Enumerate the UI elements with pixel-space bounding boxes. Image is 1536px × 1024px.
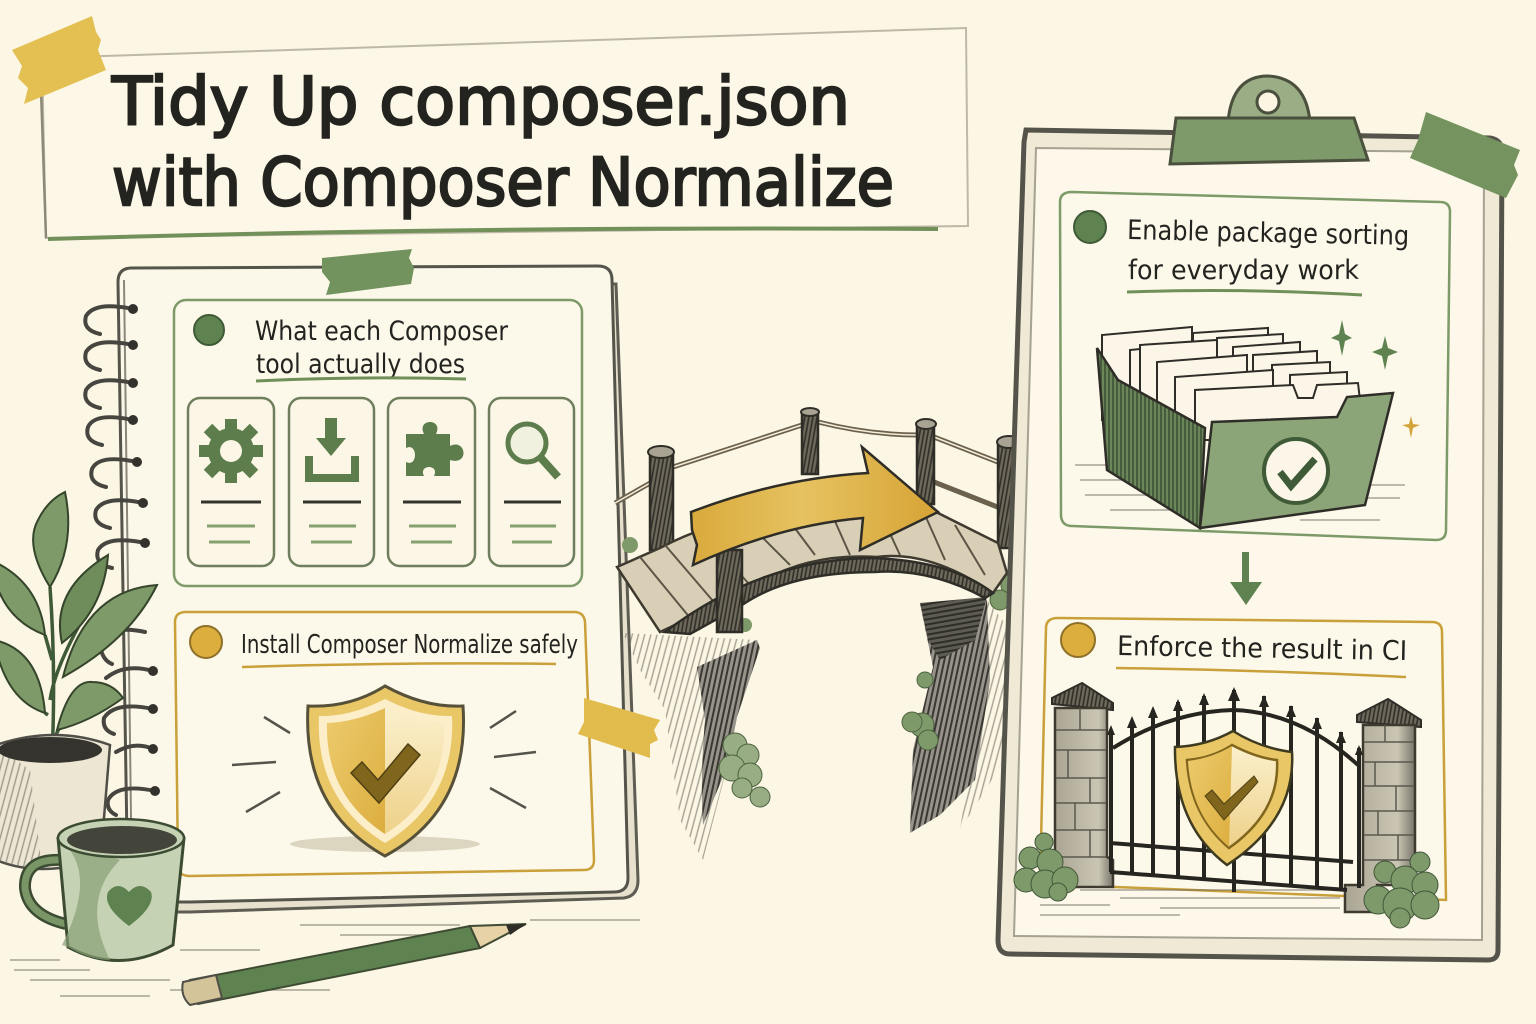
icon: heart bbox=[107, 886, 152, 926]
panel: notebook bbox=[85, 249, 660, 912]
arrow: down bbox=[1230, 552, 1262, 605]
heading: what each tool does: tool actually does bbox=[256, 349, 465, 380]
panel: enforce in CI bbox=[1014, 618, 1446, 928]
clip bbox=[1170, 76, 1368, 164]
panel: install safely bbox=[175, 612, 594, 876]
arrow bbox=[691, 447, 938, 565]
panel: what each tool does bbox=[174, 300, 582, 586]
heading: package sorting bbox=[1127, 215, 1409, 286]
moss bbox=[719, 733, 770, 807]
tape: clipboard corner bbox=[1410, 112, 1520, 198]
title panel bbox=[12, 16, 968, 239]
panel: package sorting bbox=[1060, 192, 1450, 540]
washi tape: title bbox=[12, 16, 106, 104]
arch band bbox=[665, 558, 993, 634]
pot bbox=[0, 735, 110, 869]
heading: what each tool does bbox=[255, 316, 509, 380]
illustration: coffee mug bbox=[25, 819, 184, 961]
tape: notebook top bbox=[322, 249, 414, 295]
heading: package sorting: for everyday work bbox=[1128, 255, 1359, 286]
gate bars bbox=[1110, 690, 1359, 892]
illustration: plant bbox=[0, 492, 157, 869]
bullet: gold bbox=[190, 626, 222, 658]
card: gear bbox=[188, 398, 274, 566]
front post bbox=[717, 550, 742, 632]
left cliff bbox=[623, 633, 760, 860]
card: download bbox=[289, 398, 374, 566]
bullet: gold bbox=[1061, 623, 1095, 657]
spiral binding bbox=[85, 306, 155, 815]
left pillar bbox=[1052, 683, 1113, 710]
bullet: green bbox=[1074, 211, 1106, 243]
bullet: green bbox=[194, 315, 224, 345]
illustration: desk shading bbox=[10, 920, 640, 996]
panel: clipboard bbox=[998, 76, 1520, 960]
title text: with Composer Normalize bbox=[112, 144, 894, 221]
cards bbox=[1102, 327, 1360, 440]
title text: Tidy Up composer.json bbox=[111, 63, 850, 140]
icon: shield bbox=[290, 686, 480, 856]
shield on gate bbox=[1175, 731, 1292, 865]
heading: what each tool does: What each Composer bbox=[255, 316, 509, 347]
illustration: pencil bbox=[182, 924, 526, 1005]
heading: install: Install Composer Normalize safely bbox=[241, 630, 578, 660]
card: puzzle bbox=[388, 398, 475, 566]
sparkles bbox=[1331, 320, 1420, 438]
heading: package sorting: Enable package sorting bbox=[1127, 215, 1409, 252]
rays bbox=[232, 711, 536, 812]
title underline bbox=[48, 228, 938, 239]
tape: notebook side bbox=[578, 698, 660, 758]
illustration: bridge over cliffs bbox=[615, 408, 1082, 860]
title text bbox=[111, 63, 894, 221]
icon: gate bbox=[1014, 683, 1439, 928]
deck bbox=[617, 506, 1007, 632]
posts back bbox=[650, 412, 1020, 550]
card: magnifier bbox=[489, 398, 574, 566]
heading: enforce: Enforce the result in CI bbox=[1117, 631, 1407, 667]
right cliff bbox=[960, 600, 1023, 830]
icon: file box bbox=[1075, 327, 1405, 528]
bushes bbox=[1014, 833, 1439, 928]
right pillar bbox=[1357, 699, 1421, 727]
rails bbox=[615, 422, 1055, 535]
